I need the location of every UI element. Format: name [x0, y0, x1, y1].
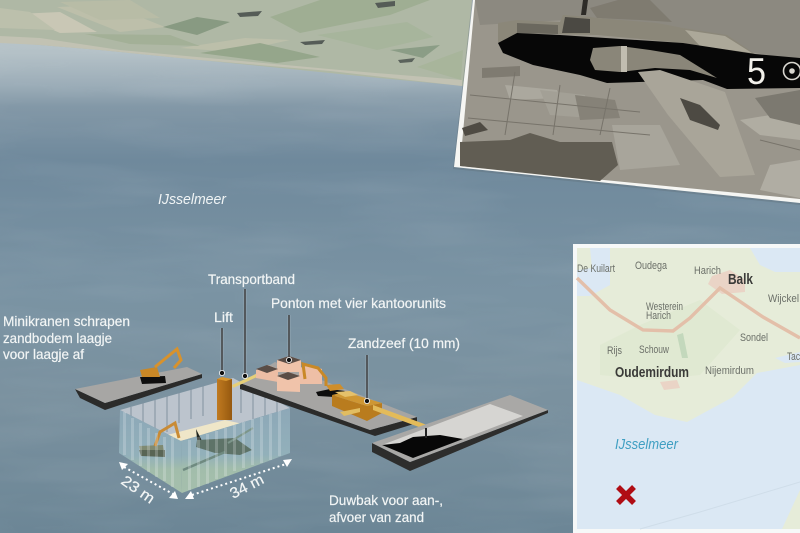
label: lift: Lift [214, 309, 233, 325]
bomber wreck [183, 428, 253, 470]
map crash site cross [618, 487, 634, 503]
label: push barge [329, 492, 443, 525]
map place names: Harich [646, 310, 671, 322]
excavator on ponton [303, 364, 345, 397]
label: conveyor: Transportband [208, 271, 295, 287]
sand patch [167, 420, 243, 441]
leader: sieve [364, 355, 370, 404]
map place names: Nijemirdum [705, 365, 754, 377]
label: mini excavators: voor laagje af [3, 346, 84, 362]
plane fuselage upper [498, 15, 755, 54]
map place names: Westerein [646, 301, 683, 313]
barge with mini excavator [75, 349, 202, 410]
sea label: IJsselmeer [158, 192, 227, 208]
conveyor to barge [373, 405, 427, 430]
photo: bomber over farmland [453, 0, 800, 205]
label: push barge: afvoer van zand [329, 509, 424, 525]
submerged excavator [139, 423, 179, 457]
plane upper wing [590, 0, 672, 22]
leader: lift [219, 328, 225, 376]
panel: location map [573, 244, 800, 533]
map place names: De Kuilart [577, 263, 615, 275]
map lake route line [640, 482, 800, 529]
wing [638, 70, 755, 177]
map land [577, 248, 800, 422]
map place names: Harich [694, 265, 721, 277]
label: mini excavators [3, 313, 130, 362]
map place names: Oudega [635, 260, 668, 272]
label: mini excavators: zandbodem laagje [3, 330, 112, 346]
chute [425, 428, 427, 438]
map road [577, 278, 800, 338]
leader: ponton [286, 315, 292, 363]
label: sieve: Zandzeef (10 mm) [348, 335, 460, 351]
dimension arrow: 23 m [119, 462, 178, 499]
map lake label: IJsselmeer [615, 437, 679, 453]
excavation pit [119, 378, 290, 493]
field boundaries [468, 72, 800, 150]
label: push barge: Duwbak voor aan-, [329, 492, 443, 508]
map place names: Oudemirdum [615, 365, 689, 381]
map place names: Sondel [740, 332, 768, 344]
map place names: Rijs [607, 345, 622, 357]
dimension label: 34 m: 34 m [227, 471, 267, 503]
aerial land strip [0, 0, 472, 86]
plane mast [581, 0, 588, 15]
pit wall stripes front [123, 411, 281, 490]
pit wall stripes back [130, 383, 278, 443]
leader: conveyor [242, 289, 248, 379]
ponton with offices [232, 356, 417, 436]
map place names: Balk [728, 272, 754, 288]
four office units [256, 356, 322, 392]
lift tower [217, 377, 232, 420]
squadron number and roundel: 5 [747, 51, 766, 92]
sand pile [382, 435, 463, 458]
map place names [577, 260, 800, 381]
conveyor to lift [232, 374, 257, 388]
excavator [140, 349, 181, 384]
engine [590, 46, 717, 78]
dimension arrow: 34 m [185, 459, 292, 499]
map place names: Schouw [639, 344, 669, 356]
push barge with sand [372, 395, 548, 471]
dimension label: 23 m: 23 m [118, 472, 158, 507]
sand sieve [332, 391, 427, 430]
pit translucent front walls [119, 410, 182, 493]
label: ponton: Ponton met vier kantoorunits [271, 295, 446, 311]
plane black belly [498, 33, 800, 89]
label: mini excavators: Minikranen schrapen [3, 313, 130, 329]
pit back walls [120, 378, 290, 441]
